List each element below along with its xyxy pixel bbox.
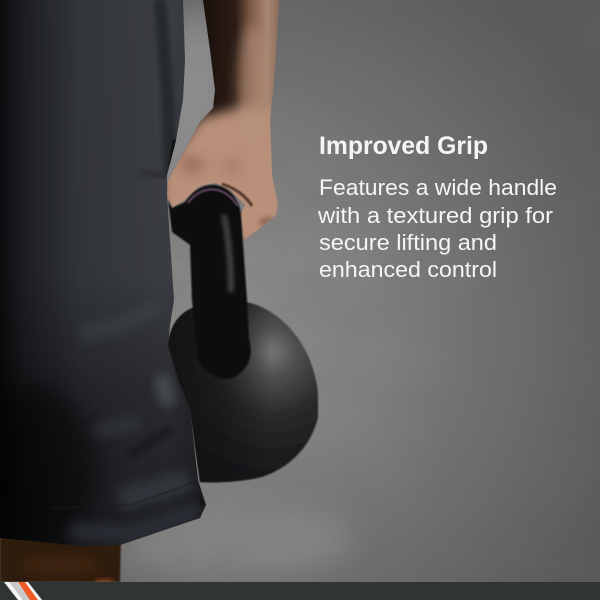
kettlebell ball (168, 301, 318, 482)
body text (317, 175, 557, 282)
fabric folds (12, 390, 102, 542)
bottom bar (0, 582, 600, 600)
photo: kettlebell (165, 185, 318, 486)
photo: lower leg (0, 535, 121, 587)
ball left shadow (168, 302, 260, 482)
shorts tag (200, 495, 206, 507)
photo: arm and hand (167, 0, 279, 241)
body text: enhanced control (319, 257, 497, 282)
grip edge (188, 189, 238, 206)
body text: Features a wide handle (319, 175, 557, 200)
kettlebell handle (168, 185, 251, 379)
handle highlight (224, 215, 231, 292)
heading: Improved Grip (319, 132, 488, 160)
body text: secure lifting and (319, 230, 497, 255)
photo: shorts (0, 0, 210, 555)
logo stripes (4, 582, 42, 600)
body text: with a textured grip for (317, 203, 553, 228)
